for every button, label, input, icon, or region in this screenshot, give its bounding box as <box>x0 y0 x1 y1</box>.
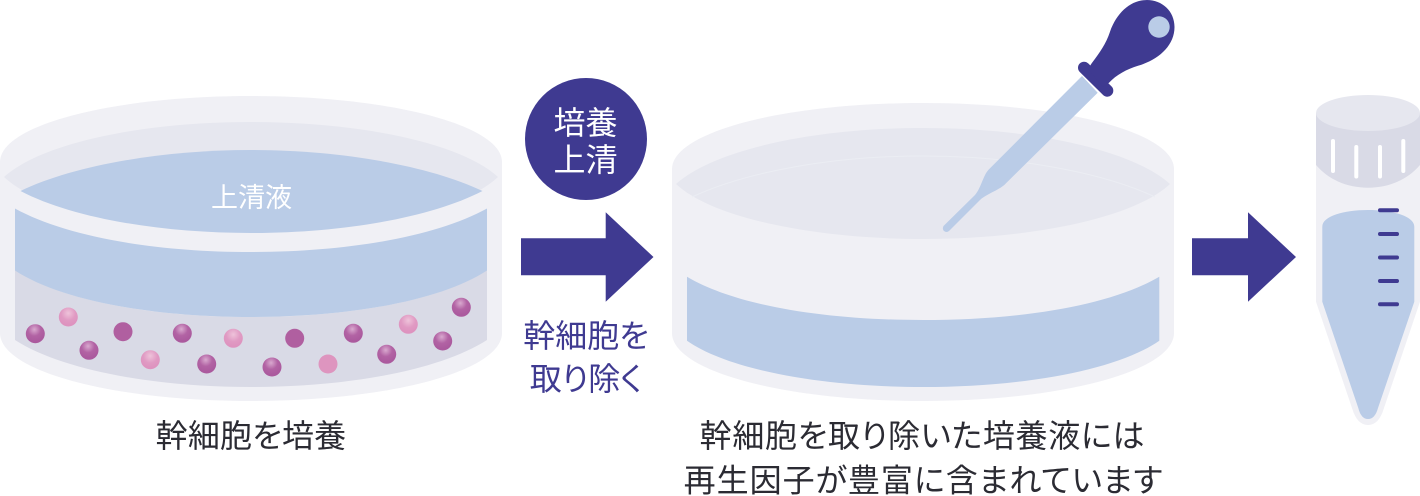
icon: pipette <box>943 0 1174 232</box>
cell layer <box>15 270 487 387</box>
pipette collar <box>1084 68 1107 91</box>
graduation marks <box>1380 210 1397 304</box>
badge: culture supernatant: 培養 <box>553 105 618 141</box>
arrow: second step <box>1192 212 1296 302</box>
tube body <box>1316 113 1420 425</box>
supernatant surface <box>20 150 482 233</box>
caption: supernatant contains regenerative factors <box>684 418 1163 496</box>
cap top <box>1316 95 1420 131</box>
panel: culture dish with cells <box>0 96 502 401</box>
tube liquid <box>1322 210 1414 419</box>
arrow: first step <box>521 212 654 302</box>
thin liquid outline <box>692 156 1155 197</box>
dish inner surface <box>4 122 498 232</box>
liquid side <box>687 277 1159 387</box>
label: remove stem cells: 幹細胞を <box>523 318 649 354</box>
caption: supernatant contains regenerative factors: 幹細胞を取り除いた培養液には <box>700 418 1145 454</box>
supernatant side <box>15 208 487 317</box>
panel: dish after removing cells <box>672 103 1174 401</box>
pipette bulb <box>1088 0 1174 87</box>
icon: centrifuge tube <box>1316 95 1420 425</box>
label: supernatant: 上清液 <box>211 183 292 213</box>
label: remove stem cells <box>523 318 649 397</box>
badge: culture supernatant: 上清 <box>553 142 618 178</box>
dish outer wall <box>0 96 502 401</box>
cap ridges <box>1333 141 1403 176</box>
stem cells <box>26 298 471 376</box>
tube cap <box>1316 113 1420 188</box>
label: remove stem cells: 取り除く <box>530 361 642 397</box>
dish outer wall <box>672 103 1174 401</box>
badge: culture supernatant <box>525 78 647 200</box>
pipette tube <box>943 76 1098 232</box>
caption: culture stem cells: 幹細胞を培養 <box>156 418 346 454</box>
dish inner surface <box>676 128 1170 239</box>
bulb highlight <box>1148 16 1170 38</box>
